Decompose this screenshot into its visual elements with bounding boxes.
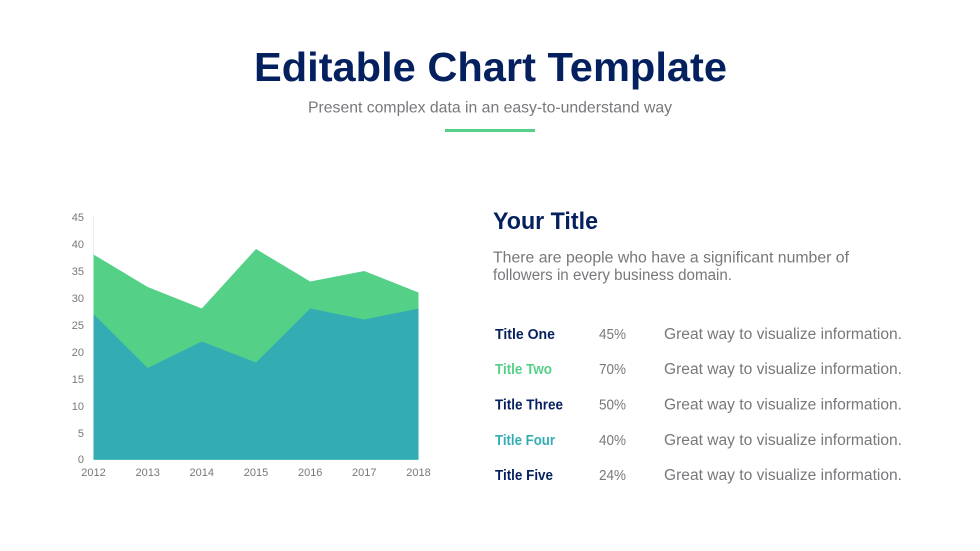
panel description: There are people who have a significant number of: [493, 250, 850, 266]
row: title four: [495, 432, 902, 449]
row: title one: Title One: [495, 327, 555, 343]
title: Editable Chart Template: [254, 44, 727, 90]
row: title five: Title Five: [495, 468, 553, 484]
row: title two: 70%: [599, 361, 626, 378]
x axis labels: 2012: [81, 467, 106, 479]
y axis labels: 5: [78, 428, 84, 440]
panel description: followers in every business domain.: [493, 267, 732, 284]
row: title two: Great way to visualize information.: [664, 361, 902, 378]
x axis labels: 2013: [135, 467, 160, 479]
row: title three: Title Three: [495, 398, 563, 414]
row: title five: [495, 467, 902, 484]
row: title four: Title Four: [495, 433, 555, 449]
y axis labels: 25: [72, 320, 84, 332]
y axis labels: 45: [72, 212, 84, 224]
y axis labels: 40: [72, 239, 84, 251]
row: title one: 45%: [599, 326, 626, 343]
row: title one: [495, 326, 902, 343]
row: title five: 24%: [599, 467, 626, 484]
row: title five: Great way to visualize information.: [664, 467, 902, 484]
panel description: [493, 250, 850, 284]
x axis labels: 2015: [244, 467, 268, 479]
x axis labels: 2017: [352, 467, 377, 479]
teal area series: [94, 308, 418, 460]
row: title three: 50%: [599, 396, 626, 414]
subtitle: Present complex data in an easy-to-understand way: [308, 100, 672, 116]
title underline accent: [445, 129, 535, 132]
row: title two: Title Two: [495, 362, 552, 378]
green area series: [94, 249, 418, 460]
row: title three: Great way to visualize information.: [664, 396, 902, 414]
x axis labels: 2018: [406, 467, 431, 479]
y axis labels: [72, 212, 84, 466]
y axis labels: 35: [72, 266, 84, 278]
y axis labels: 0: [78, 454, 84, 466]
x axis labels: [81, 467, 431, 479]
row: title four: 40%: [599, 432, 626, 449]
x axis labels: 2016: [298, 467, 322, 479]
y axis labels: 30: [72, 293, 84, 305]
y axis labels: 20: [72, 347, 84, 359]
x axis labels: 2014: [190, 467, 214, 479]
area chart: [72, 212, 431, 479]
y axis labels: 10: [72, 401, 84, 413]
row: title one: Great way to visualize information.: [664, 326, 902, 343]
row: title four: Great way to visualize information.: [664, 432, 902, 449]
row: title two: [495, 361, 902, 378]
row: title three: [495, 396, 902, 414]
panel heading: Your Title: [493, 208, 598, 235]
y axis labels: 15: [72, 374, 84, 386]
